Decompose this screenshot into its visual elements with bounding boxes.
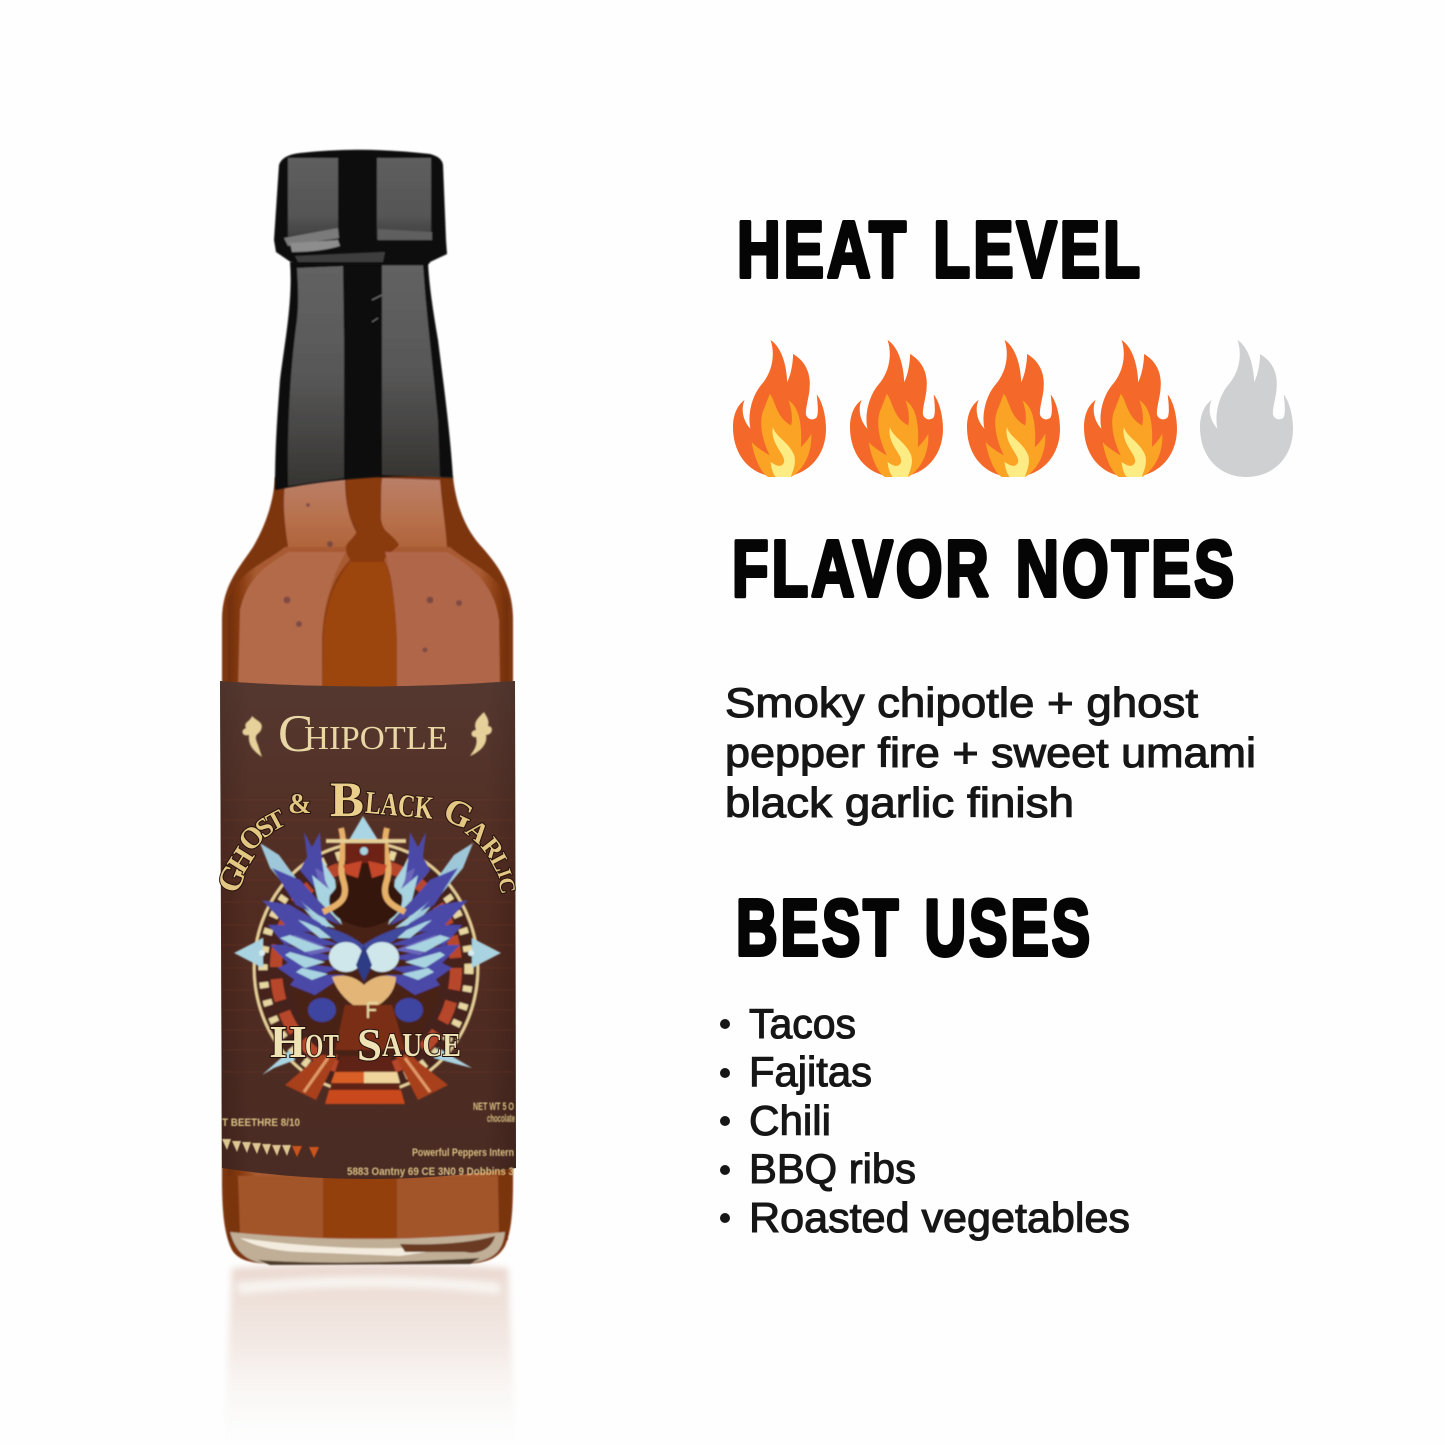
heading: flavor notes: FLAVOR NOTES xyxy=(732,524,1237,613)
icon: flame 2 xyxy=(850,340,943,477)
right wing feathers xyxy=(385,832,468,995)
label text: Chipotle: C xyxy=(278,705,313,763)
sauce highlights upper xyxy=(284,478,358,547)
label text: Chipotle: HIPOTLE xyxy=(304,720,448,757)
black cap xyxy=(274,150,447,265)
glass base xyxy=(230,1232,505,1264)
hot sauce label xyxy=(210,681,521,1179)
flavor notes text: black garlic finish xyxy=(725,779,1074,826)
label fine print: net weight and address: 5883 Oantny 69 CE 3N0 9 Dobbins 3 xyxy=(347,1166,514,1178)
label text: Hot Sauce: OT xyxy=(305,1028,339,1065)
label ornaments xyxy=(242,712,492,757)
product photo: hot sauce bottle xyxy=(210,150,521,1445)
flavor notes text xyxy=(725,679,1256,826)
label text: Hot Sauce: S xyxy=(357,1019,382,1070)
label text: Hot Sauce xyxy=(270,1016,461,1070)
label text: Ghost & Black Garlic: H xyxy=(221,841,261,879)
label text: Ghost & Black Garlic: B xyxy=(330,771,364,827)
icon: flame 3 xyxy=(967,340,1060,477)
left wing feathers xyxy=(262,832,345,995)
label fine print: heat rating xyxy=(222,1117,319,1158)
emblem ring xyxy=(254,843,478,1093)
label fine print: net weight and address: Powerful Peppers Intern xyxy=(412,1147,514,1159)
label text: Ghost & Black Garlic: S xyxy=(249,811,280,844)
label text: Ghost & Black Garlic: I xyxy=(492,866,516,881)
label text: Ghost & Black Garlic: L xyxy=(484,850,515,876)
label text: Hot Sauce: AUCE xyxy=(382,1027,461,1064)
icon: grey flame xyxy=(1200,340,1293,477)
owl face and body xyxy=(308,925,423,1050)
heading: heat level: HEAT LEVEL xyxy=(737,205,1143,294)
icon: flame 1 xyxy=(733,340,826,477)
heading: best uses: BEST USES xyxy=(736,883,1093,972)
label text: Ghost & Black Garlic: A xyxy=(460,814,496,851)
label text: Ghost & Black Garlic: G xyxy=(210,860,254,898)
label text: Ghost & Black Garlic: C xyxy=(493,875,521,896)
black shrink-wrap neck xyxy=(275,262,453,490)
label text: Ghost & Black Garlic: T xyxy=(261,804,290,837)
label text: Chipotle xyxy=(278,705,448,763)
label text: Ghost & Black Garlic: R xyxy=(475,832,510,865)
list item: fajitas: Fajitas xyxy=(749,1048,872,1095)
label fine print: heat rating: T BEETHRE 8/10 xyxy=(222,1117,300,1129)
sauce-filled glass body xyxy=(222,474,513,1265)
heat rating icons xyxy=(222,1139,319,1158)
lower sauce band xyxy=(238,1176,500,1239)
label fine print: net weight and address: chocolate xyxy=(487,1113,515,1125)
icon: flame 4 xyxy=(1084,340,1177,477)
list item: roasted vegetables: Roasted vegetables xyxy=(749,1194,1130,1241)
best uses list xyxy=(720,1000,1130,1241)
label text: Ghost & Black Garlic: & xyxy=(288,789,311,820)
list item: tacos: Tacos xyxy=(749,1000,856,1047)
label text: Hot Sauce: H xyxy=(270,1016,306,1067)
flavor notes text: Smoky chipotle + ghost xyxy=(725,679,1198,726)
bottle reflection xyxy=(224,1264,516,1445)
list item: bbq ribs: BBQ ribs xyxy=(749,1145,916,1192)
label text: Ghost & Black Garlic: G xyxy=(438,789,480,837)
side spikes xyxy=(234,938,263,968)
sauce speckles xyxy=(284,503,462,1220)
pyramid xyxy=(285,1055,448,1104)
flavor notes text: pepper fire + sweet umami xyxy=(725,729,1256,776)
heat level rating: 4 of 5 flames xyxy=(733,340,1293,477)
label emblem xyxy=(234,816,501,1104)
label text: Ghost & Black Garlic: LACK xyxy=(364,784,435,826)
label fine print: net weight and address: NET WT 5 O xyxy=(473,1101,514,1113)
label fine print: net weight and address xyxy=(347,1101,515,1178)
label text: Ghost & Black Garlic xyxy=(210,771,521,898)
list item: chili: Chili xyxy=(749,1097,831,1144)
label text: Ghost & Black Garlic: O xyxy=(232,818,272,858)
helmet and horns xyxy=(323,816,406,928)
